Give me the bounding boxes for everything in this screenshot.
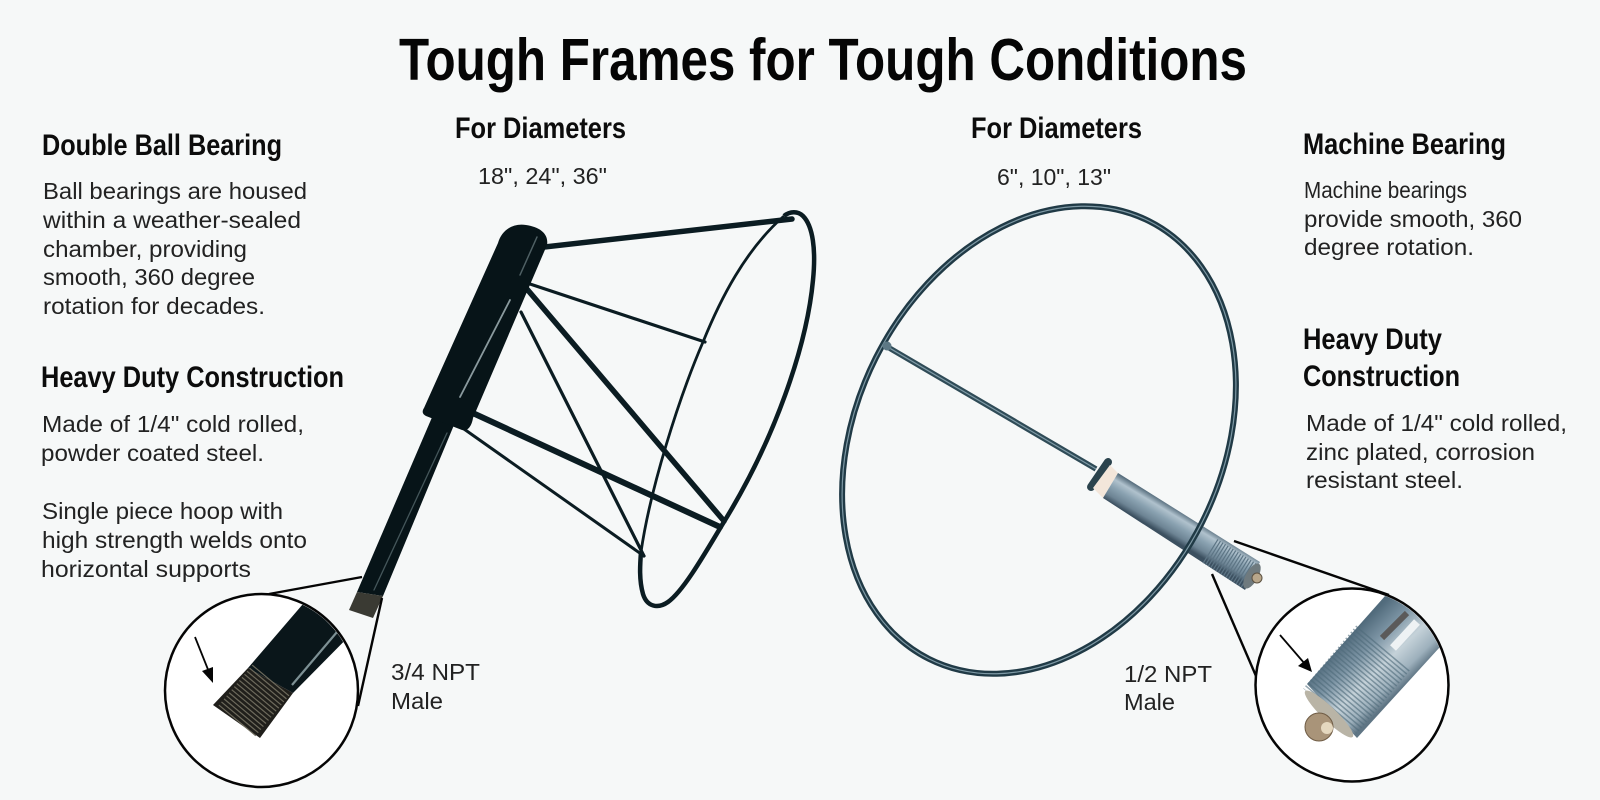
text: 18, 24, 36: 18", 24", 36" xyxy=(478,163,607,189)
thread xyxy=(349,592,383,618)
heading: machine bearing: Machine Bearing xyxy=(1303,128,1506,161)
panel: machine bearing xyxy=(1303,128,1522,260)
text: ball bearing description: rotation for decades. xyxy=(43,293,265,319)
highlight xyxy=(374,237,537,590)
arrow xyxy=(195,637,213,683)
callout lines xyxy=(1212,541,1389,676)
text: machine bearing description: provide smooth, 360 xyxy=(1304,206,1522,232)
heading: heavy duty construction: Construction xyxy=(1303,360,1460,393)
magnified bolt xyxy=(1303,596,1440,742)
heading: double ball bearing: Double Ball Bearing xyxy=(42,129,282,162)
text: zinc plated steel: zinc plated, corrosion xyxy=(1306,439,1535,465)
label: 1/2 NPT male xyxy=(1124,661,1212,715)
title: Tough Frames for Tough Conditions xyxy=(399,27,1247,93)
heading: heavy duty construction xyxy=(1303,323,1460,393)
text: machine bearing description xyxy=(1304,177,1522,260)
text: ball bearing description: chamber, providing xyxy=(43,236,247,262)
text: zinc plated steel xyxy=(1306,410,1567,493)
panel: heavy duty construction right xyxy=(1303,323,1567,493)
heading: for diameters right: For Diameters xyxy=(971,112,1142,145)
text: single piece hoop: horizontal supports xyxy=(41,556,251,582)
label: 1/2 NPT male: Male xyxy=(1124,689,1175,715)
magnified pipe xyxy=(213,604,344,738)
text: powder coated steel xyxy=(41,411,304,466)
arrow xyxy=(1280,635,1312,672)
heading: for diameters left: For Diameters xyxy=(455,112,626,145)
lower stem xyxy=(357,415,454,596)
hoop xyxy=(640,212,814,606)
tube threads xyxy=(1210,551,1250,576)
text: machine bearing description: Machine bearings xyxy=(1304,177,1467,203)
heading: heavy duty construction: Heavy Duty xyxy=(1303,323,1442,356)
text: powder coated steel: Made of 1/4" cold rolled, xyxy=(42,411,304,437)
inset: 3/4 NPT thread xyxy=(165,577,382,787)
diameters left xyxy=(455,112,626,189)
upper tube xyxy=(423,225,547,430)
diameters right xyxy=(971,112,1142,190)
struts xyxy=(438,219,792,556)
heading: heavy duty construction: Heavy Duty Construction xyxy=(41,361,344,394)
text: single piece hoop: high strength welds onto xyxy=(42,527,307,553)
tube tip xyxy=(1240,561,1264,591)
ring xyxy=(766,139,1312,741)
label: 3/4 NPT male: 3/4 NPT xyxy=(391,659,480,685)
text: ball bearing description: smooth, 360 degree xyxy=(43,264,255,290)
text: zinc plated steel: Made of 1/4" cold rolled, xyxy=(1306,410,1567,436)
text: ball bearing description: within a weather-sealed xyxy=(42,207,301,233)
diagram: conical frame xyxy=(349,212,814,618)
collar xyxy=(1091,462,1118,498)
text: 6, 10, 13: 6", 10", 13" xyxy=(997,164,1111,190)
inset: 1/2 NPT thread xyxy=(1212,541,1450,782)
text: zinc plated steel: resistant steel. xyxy=(1306,467,1463,493)
rod weld xyxy=(882,342,892,350)
threaded tube xyxy=(1103,473,1260,590)
text: ball bearing description xyxy=(42,178,307,319)
label: 3/4 NPT male xyxy=(391,659,480,714)
panel: double ball bearing xyxy=(42,129,307,319)
callout lines xyxy=(269,577,382,706)
magnifier circle xyxy=(165,594,358,787)
label: 1/2 NPT male: 1/2 NPT xyxy=(1124,661,1212,687)
text: ball bearing description: Ball bearings are housed xyxy=(43,178,307,204)
rod xyxy=(886,346,1096,469)
text: machine bearing description: degree rotation. xyxy=(1304,234,1474,260)
magnifier circle xyxy=(1256,588,1448,782)
label: 3/4 NPT male: Male xyxy=(391,688,443,714)
text: single piece hoop xyxy=(41,498,307,582)
text: single piece hoop: Single piece hoop with xyxy=(42,498,283,524)
panel: heavy duty construction left xyxy=(41,361,344,582)
diagram: ring frame xyxy=(766,139,1312,741)
text: powder coated steel: powder coated steel. xyxy=(41,440,264,466)
